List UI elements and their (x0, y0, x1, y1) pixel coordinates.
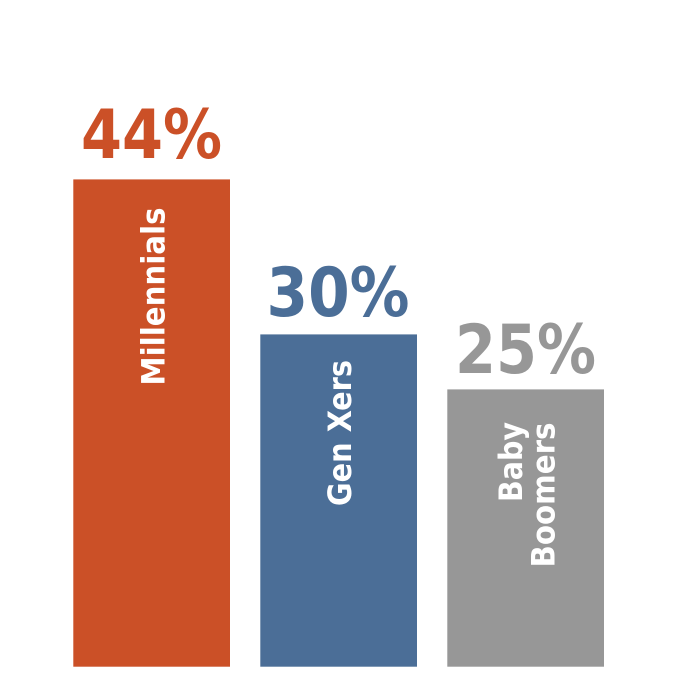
bar group: Millennials (73, 96, 230, 667)
bar label: Baby: Baby (492, 422, 530, 502)
value label: 25%: 25% (455, 311, 596, 390)
bar label: Boomers: Boomers (524, 422, 562, 568)
bar group: Baby Boomers (447, 311, 604, 667)
bar: Baby Boomers 25% (447, 389, 604, 667)
bar group: Gen Xers (260, 254, 417, 667)
value label: 30%: 30% (266, 254, 410, 333)
bar label: Gen Xers: Gen Xers (321, 360, 359, 506)
bar: Gen Xers 30% (260, 334, 417, 667)
bar: Millennials 44% (73, 179, 230, 667)
bar label: Millennials: Millennials (134, 208, 172, 386)
value label: 44%: 44% (81, 96, 222, 175)
